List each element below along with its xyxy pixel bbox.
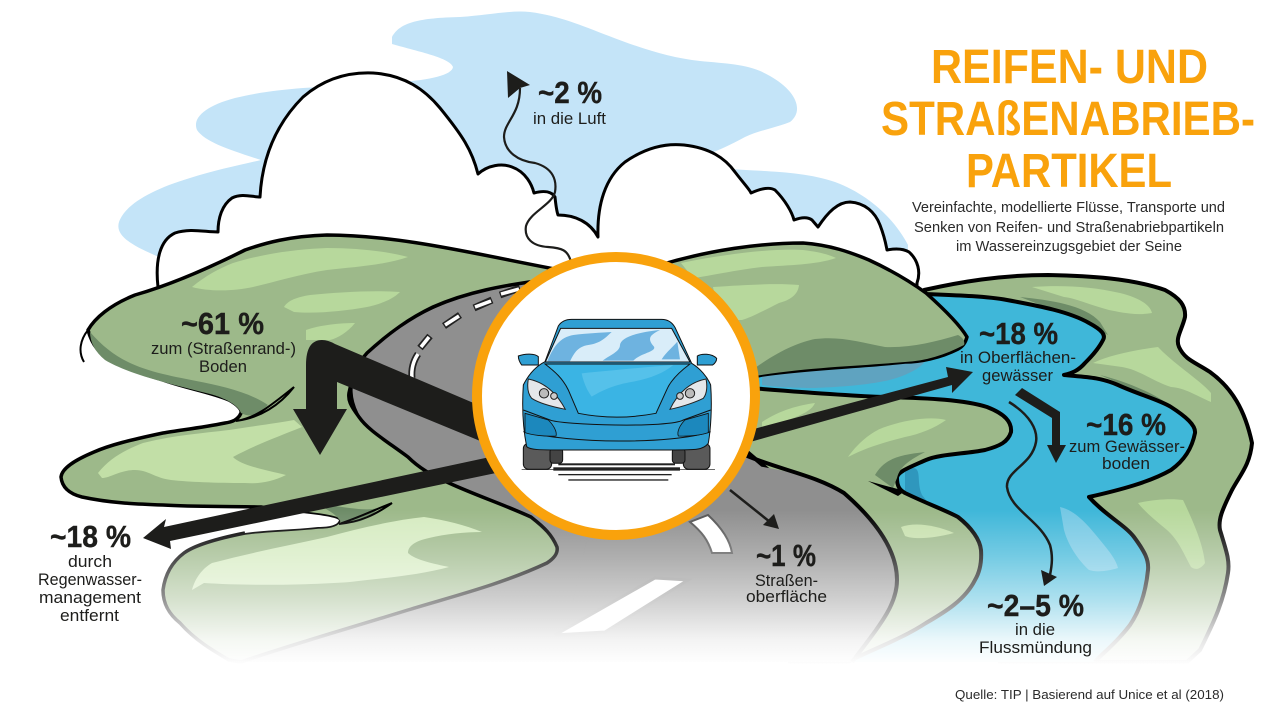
- river: [740, 293, 1195, 662]
- arrow 18 percent left: [143, 457, 496, 549]
- label: 18 percent surface water: gewässer: [982, 366, 1053, 385]
- label: 16 percent: ~16 %: [1086, 407, 1166, 442]
- middle land highlights: [762, 403, 954, 538]
- white gap between lobes: [240, 513, 339, 533]
- car circle: [477, 257, 755, 535]
- label: 16 percent: [1069, 407, 1185, 473]
- label: 18 percent stormwater: Regenwasser-: [38, 570, 142, 589]
- mirrors: [518, 354, 717, 365]
- hood: [545, 364, 690, 417]
- body: [523, 319, 711, 450]
- label: 1 percent: [746, 538, 827, 606]
- label: 61 percent: Boden: [199, 357, 247, 376]
- label: 18 percent stormwater: entfernt: [60, 606, 119, 625]
- arrow 16 percent: [1015, 388, 1066, 463]
- label: 2 percent: in die Luft: [533, 109, 606, 128]
- label: 16 percent: boden: [1102, 454, 1150, 473]
- label: 1 percent: Straßen-: [755, 571, 818, 590]
- hood highlight: [582, 365, 673, 397]
- arrow 1 percent: [730, 490, 779, 529]
- air arrow: [504, 71, 571, 262]
- sky background: [118, 12, 908, 300]
- left land: [61, 235, 560, 662]
- label: 2 percent: ~2 %: [538, 75, 602, 110]
- arrow 61 percent: [293, 340, 490, 455]
- label: 16 percent: zum Gewässer-: [1069, 437, 1185, 456]
- car: [518, 319, 717, 481]
- river bank line: [926, 294, 1195, 662]
- far right land highlights: [1032, 286, 1211, 569]
- label: 61 percent: zum (Straßenrand-): [151, 339, 296, 358]
- far right land: [924, 275, 1252, 662]
- label: 18 percent surface water: [960, 316, 1076, 385]
- subtitle: [912, 199, 1225, 255]
- river shading: [762, 360, 1118, 571]
- label: 2 to 5 percent: in die: [1015, 620, 1055, 639]
- middle land: [745, 388, 1011, 662]
- windshield reflections: [547, 330, 680, 361]
- road edge and dashes: [351, 272, 552, 500]
- right hill: [650, 243, 967, 400]
- title: REIFEN- UND: [931, 41, 1208, 94]
- label: 18 percent surface water: ~18 %: [979, 316, 1058, 351]
- label: 61 percent: ~61 %: [181, 306, 264, 341]
- wheels: [523, 443, 710, 469]
- label: 61 percent: [151, 306, 296, 376]
- label: 18 percent surface water: in Oberflächen-: [960, 348, 1076, 367]
- label: 18 percent stormwater: [38, 519, 142, 625]
- road right edge: [745, 455, 897, 662]
- label: 2 percent: [533, 75, 606, 128]
- windshield: [545, 328, 690, 362]
- left land highlights: [81, 248, 482, 590]
- right hill shading and highlights: [681, 250, 964, 376]
- label: 1 percent: ~1 %: [756, 538, 816, 573]
- label: 2 to 5 percent: Flussmündung: [979, 638, 1092, 657]
- road shadow: [522, 463, 715, 481]
- headlights: [528, 379, 707, 409]
- bottom fade: [0, 510, 1280, 665]
- road right section: [560, 462, 897, 662]
- road: [241, 268, 897, 662]
- arrow 18 percent right: [750, 367, 973, 442]
- label: 2 to 5 percent: ~2–5 %: [987, 588, 1084, 623]
- title: PARTIKEL: [966, 145, 1172, 198]
- arrow to estuary: [1007, 402, 1057, 586]
- label: 1 percent: oberfläche: [746, 587, 827, 606]
- label: 2 to 5 percent: [979, 588, 1092, 657]
- subtitle: Senken von Reifen- und Straßenabriebpartikeln: [914, 219, 1224, 236]
- bumper and vents: [523, 410, 711, 441]
- label: 18 percent stormwater: management: [39, 588, 141, 607]
- title: [881, 41, 1255, 198]
- subtitle: Vereinfachte, modellierte Flüsse, Transporte und: [912, 199, 1225, 216]
- label: 18 percent stormwater: ~18 %: [50, 519, 131, 554]
- subtitle: im Wassereinzugsgebiet der Seine: [956, 238, 1182, 255]
- river shading on banks: [1020, 297, 1198, 432]
- source: Quelle: TIP | Basierend auf Unice et al (2018): [955, 687, 1224, 702]
- road dashes lower: [555, 515, 732, 635]
- clouds: [157, 73, 919, 320]
- label: 18 percent stormwater: durch: [68, 552, 112, 571]
